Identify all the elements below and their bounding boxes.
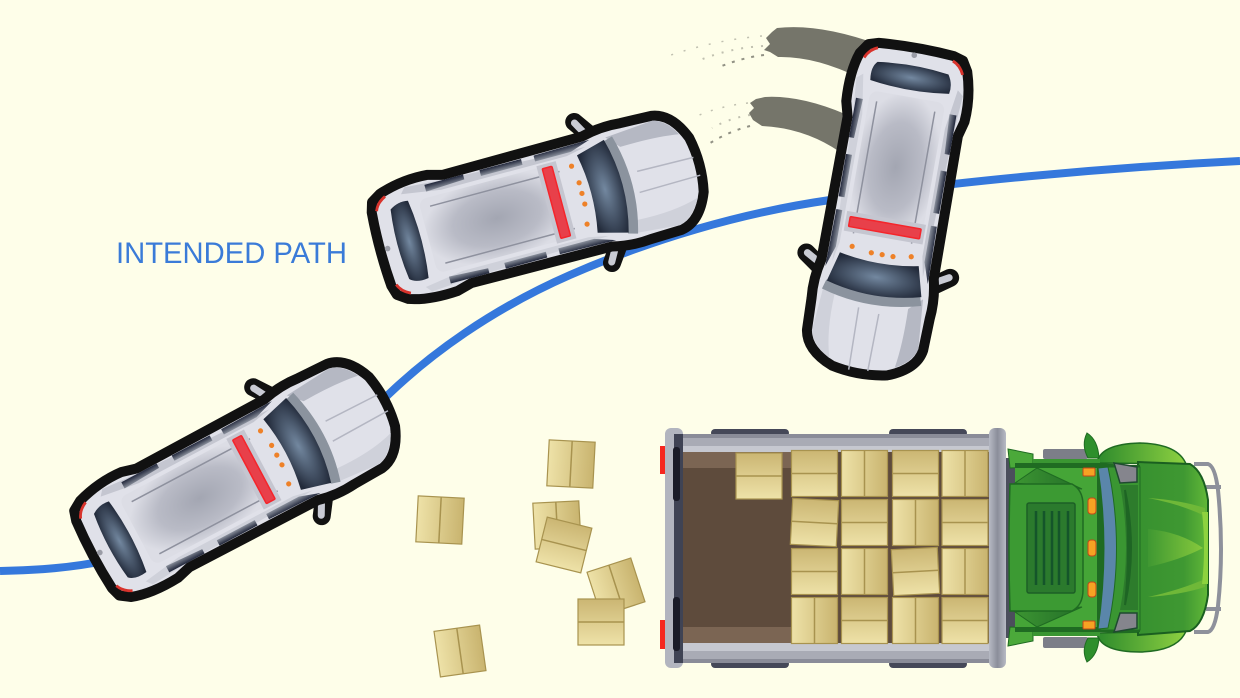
trailer frame — [675, 434, 997, 663]
car: middle position — [361, 94, 718, 320]
fenders — [1097, 443, 1186, 464]
wheels — [711, 429, 967, 668]
truck — [660, 428, 1221, 668]
cab rear section — [1138, 462, 1208, 635]
hood — [1009, 484, 1083, 611]
bumper guard — [1194, 464, 1221, 632]
label: intended path: INTENDED PATH — [116, 237, 347, 270]
cargo boxes — [736, 450, 988, 644]
trailer posts — [665, 428, 683, 668]
side steps — [1043, 449, 1088, 459]
car: swerved position — [787, 35, 988, 386]
cab front frame — [1033, 459, 1100, 463]
windshield band — [1098, 467, 1116, 629]
cab connector — [1006, 458, 1018, 638]
centre panel — [1100, 467, 1140, 630]
grey headlights — [1114, 463, 1137, 483]
skid marks — [668, 27, 880, 152]
mirrors — [1084, 433, 1099, 458]
grille — [1027, 503, 1075, 593]
front corner fairings — [1008, 449, 1033, 468]
intended path line — [0, 161, 1240, 571]
loose boxes on road — [416, 440, 645, 677]
car: lower left position — [58, 336, 419, 620]
orange marker lights — [1083, 468, 1096, 629]
cargo bed — [683, 452, 989, 643]
tail lights — [660, 446, 666, 649]
